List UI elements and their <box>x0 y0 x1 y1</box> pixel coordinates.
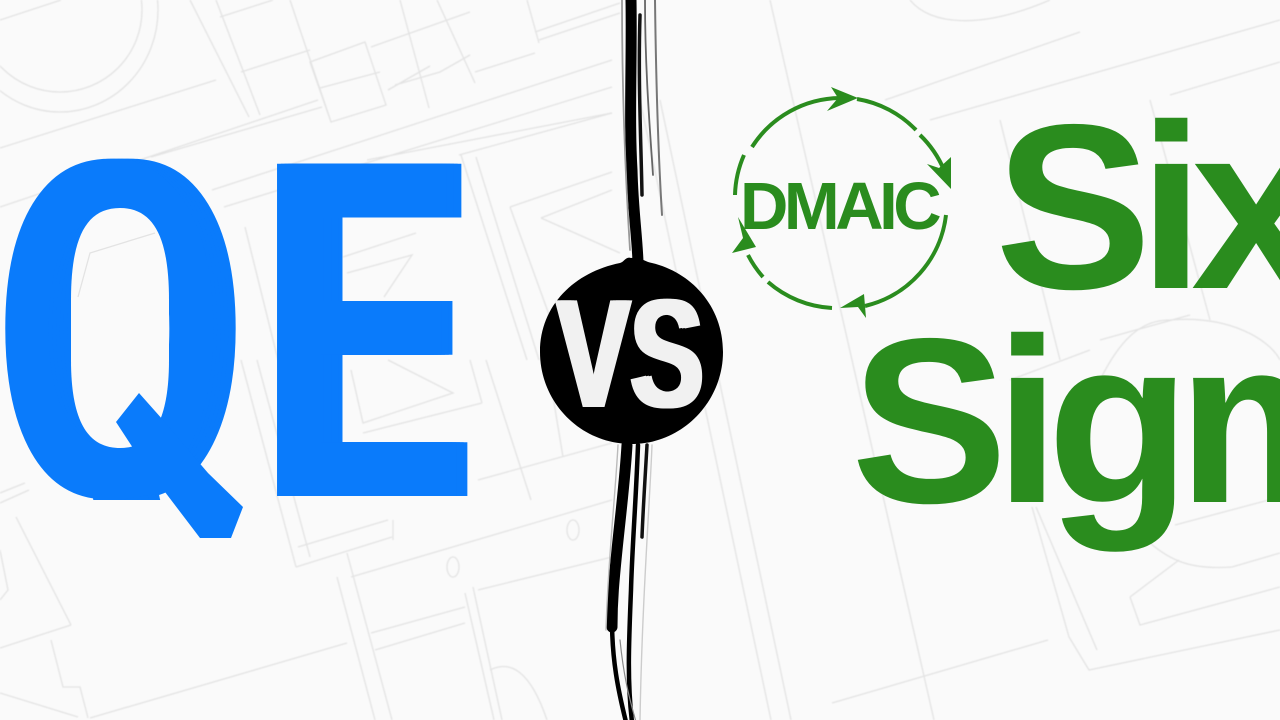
divider: black ink strokes below the badge <box>605 443 653 720</box>
heading: QE <box>0 60 468 599</box>
letter E: E <box>257 60 457 599</box>
badge disc <box>540 258 723 444</box>
VS label: VS <box>554 267 701 440</box>
divider: black ink strokes above the badge <box>621 0 663 260</box>
badge: VS circle <box>540 258 723 444</box>
DMAIC label: DMAIC <box>740 169 937 244</box>
cycle arcs and arrowheads <box>732 87 951 318</box>
DMAIC cycle icon <box>732 87 951 318</box>
